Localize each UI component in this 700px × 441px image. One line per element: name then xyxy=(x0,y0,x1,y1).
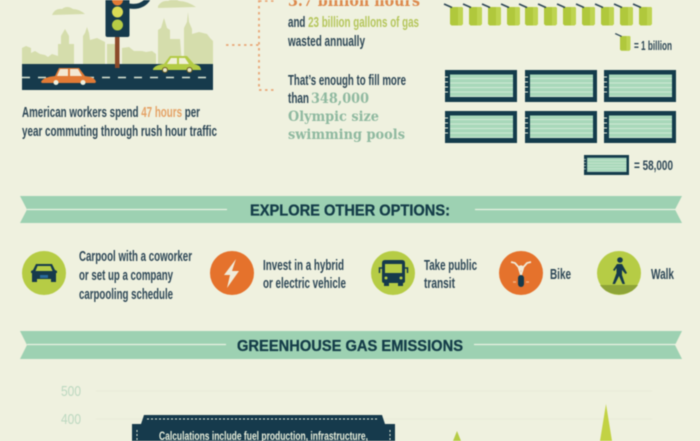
skyline xyxy=(22,0,213,64)
stat: hours and gas wasted xyxy=(287,0,420,50)
icon: lightning bolt xyxy=(224,259,239,288)
option: carpool: or set up a company xyxy=(79,268,173,284)
stat: hours and gas wasted: and 23 billion gallons of gas xyxy=(288,15,419,31)
caption: commuting hours: year commuting through rush hour traffic xyxy=(22,124,217,140)
traffic light arm xyxy=(129,0,148,6)
caption: commuting hours xyxy=(22,105,217,140)
gas can legend xyxy=(615,34,672,53)
ribbon: greenhouse gas emissions: GREENHOUSE GAS EMISSIONS xyxy=(237,338,463,355)
option: walk: Walk xyxy=(651,267,675,283)
ribbon: greenhouse gas emissions xyxy=(20,331,682,359)
stat: swimming pools: 348,000 xyxy=(311,91,369,107)
ribbon: explore other options: EXPLORE OTHER OPTIONS: xyxy=(250,202,450,220)
stat: swimming pools: Olympic size xyxy=(288,109,379,125)
option: public transit xyxy=(371,251,477,295)
option: carpool xyxy=(22,249,192,303)
option: hybrid or electric vehicle: Invest in a hybrid xyxy=(263,258,344,274)
pool pictogram xyxy=(445,70,676,143)
traffic light xyxy=(106,0,130,37)
icon: bus xyxy=(380,260,408,286)
caption: commuting hours: American workers spend 47 hours per xyxy=(22,105,200,121)
option: walk xyxy=(597,251,675,295)
spike: mode one xyxy=(453,431,461,441)
green car xyxy=(153,56,201,72)
illustration: city street with traffic light xyxy=(22,0,213,90)
option: bike xyxy=(499,251,571,295)
stat: swimming pools: swimming pools xyxy=(288,127,405,143)
spike: mode two xyxy=(600,404,612,441)
option: public transit: Take public xyxy=(424,258,477,274)
stat: hours and gas wasted: wasted annually xyxy=(287,34,365,50)
icon: car xyxy=(31,264,57,282)
option: public transit: transit xyxy=(424,276,455,292)
dotted connector xyxy=(226,0,274,90)
chart: emissions xyxy=(61,383,652,441)
stat: swimming pools: That’s enough to fill more xyxy=(288,73,406,89)
option: bike: Bike xyxy=(550,267,571,283)
gas can legend: = 1 billion xyxy=(634,38,672,53)
y axis labels xyxy=(61,383,81,428)
calculation note xyxy=(132,415,395,441)
stat: swimming pools: than xyxy=(288,91,309,107)
icon: walking person xyxy=(612,257,627,284)
option: carpool: carpooling schedule xyxy=(79,287,173,303)
y axis labels: 500 xyxy=(61,383,81,400)
gas can pictogram xyxy=(444,4,652,26)
traffic light pole xyxy=(115,36,120,68)
option: hybrid or electric vehicle xyxy=(210,251,346,295)
road xyxy=(22,64,213,90)
stat: swimming pools xyxy=(288,73,406,143)
ribbon: explore other options xyxy=(20,196,682,223)
option: carpool: Carpool with a coworker xyxy=(79,249,192,265)
icon: bicycle front view xyxy=(511,262,531,287)
pool legend: = 58,000 xyxy=(634,158,673,173)
y axis labels: 400 xyxy=(61,411,81,428)
orange car xyxy=(41,68,96,85)
pool legend xyxy=(584,155,673,175)
option: hybrid or electric vehicle: or electric vehicle xyxy=(263,276,346,292)
